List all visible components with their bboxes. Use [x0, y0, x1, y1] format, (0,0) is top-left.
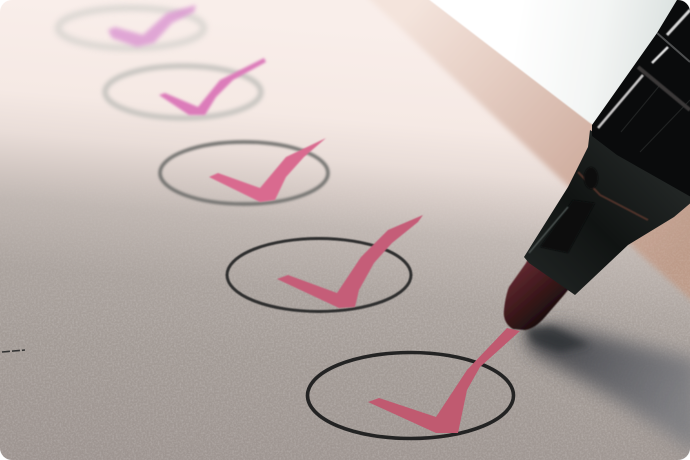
marker: collar band	[638, 67, 690, 110]
marker: dark smudge on seam	[584, 167, 598, 189]
marker: barrel	[592, 0, 690, 202]
marker: cone highlight	[529, 207, 568, 253]
marker: felt tip	[504, 255, 572, 330]
background: white area beyond the surface	[423, 0, 690, 195]
checklist item 5 (in focus)	[308, 328, 520, 438]
paper grain	[0, 238, 690, 460]
checklist item 3	[160, 138, 328, 204]
marker: cone section	[524, 130, 690, 295]
marker: highlight streak upper	[667, 10, 690, 35]
stray pen mark	[2, 350, 25, 352]
marker: barrel facet lines	[621, 85, 690, 152]
marker: upper collar	[657, 33, 690, 62]
checklist item 2	[105, 58, 266, 118]
marker: highlight streak lower	[598, 75, 643, 128]
marker: cone window reflection	[540, 200, 595, 253]
checklist item 4	[227, 215, 423, 312]
background: tan surface behind paper	[360, 0, 690, 308]
marker: highlight streak middle	[652, 47, 668, 63]
marker shadow	[522, 325, 690, 455]
checklist item 1 (most blurred)	[58, 5, 204, 48]
marker pen	[504, 0, 690, 330]
marker: brown seam	[578, 172, 648, 220]
